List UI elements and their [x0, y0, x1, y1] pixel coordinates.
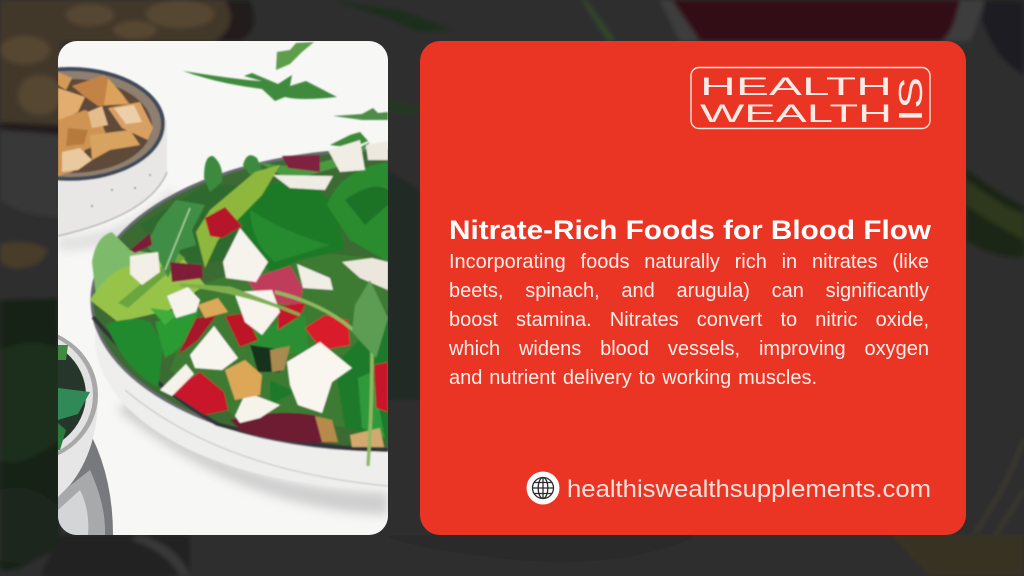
cheese — [223, 228, 268, 282]
icon: globe — [526, 472, 560, 504]
body text: and nutrient delivery to working muscles. — [449, 367, 817, 389]
walnut bowl — [58, 120, 167, 237]
arugula leaf on salad — [146, 200, 205, 278]
logo: Health is Wealth: HEALTH — [700, 73, 892, 101]
body text: beets, spinach, and arugula) can significantly — [449, 280, 929, 302]
heading: Nitrate-Rich Foods for Blood Flow — [449, 215, 932, 245]
table shadows — [58, 188, 178, 250]
logo: Health is Wealth: IS — [892, 77, 929, 122]
body text: boost stamina. Nitrates convert to nitric oxide, — [449, 309, 929, 331]
panel: red content card — [420, 41, 966, 535]
small bowl with greens — [58, 401, 98, 497]
panel: salad photo — [58, 41, 388, 535]
website url: healthiswealthsupplements.com — [567, 476, 931, 503]
logo: Health is Wealth: WEALTH — [700, 100, 892, 128]
logo: Health is Wealth — [690, 66, 931, 130]
side plate — [66, 438, 113, 535]
body text: which widens blood vessels, improving oxygen — [449, 338, 929, 360]
beets — [205, 207, 242, 238]
body text: Incorporating foods naturally rich in nitrates (like — [449, 251, 929, 273]
plate — [96, 151, 388, 483]
body text — [449, 251, 929, 389]
walnuts — [58, 72, 153, 176]
table arugula — [183, 71, 337, 101]
arugula stems — [180, 285, 300, 315]
walnuts — [225, 360, 262, 400]
salad greens — [140, 185, 240, 265]
